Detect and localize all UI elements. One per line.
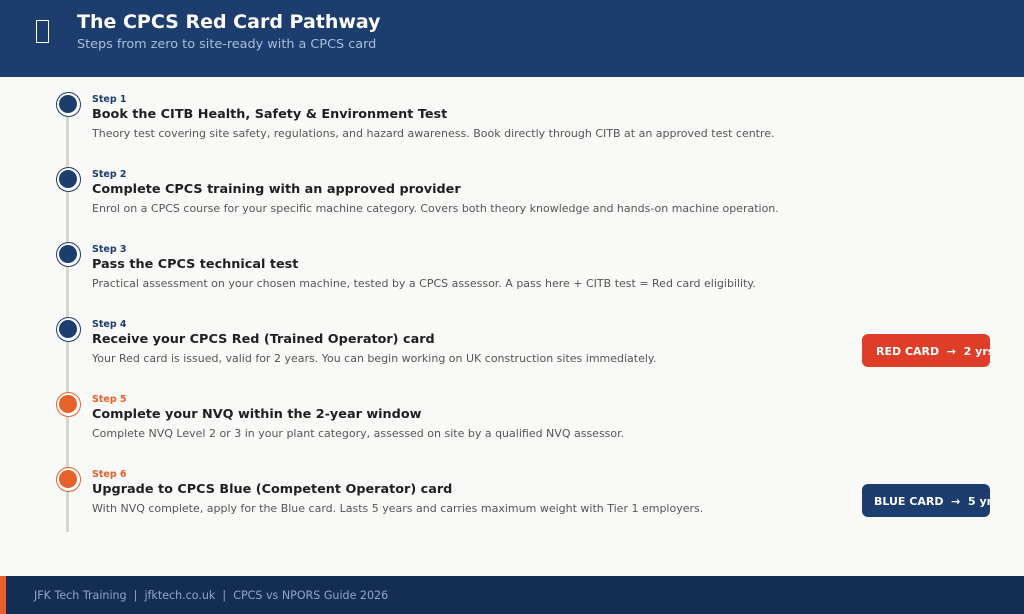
header — [0, 0, 1024, 77]
step 4: Step 4 — [92, 319, 127, 330]
badge: blue card — [862, 484, 990, 517]
step 3: Practical assessment on your chosen machine, tested by a CPCS assessor. A pass here + CITB test = Red card eligibility. — [92, 277, 756, 290]
step 6: With NVQ complete, apply for the Blue card. Lasts 5 years and carries maximum weight with Tier 1 employers. — [92, 502, 703, 515]
step 5: Step 5 — [92, 394, 127, 405]
subtitle: Steps from zero to site-ready with a CPCS card — [77, 37, 376, 52]
step 3 — [56, 242, 756, 290]
footer — [0, 576, 1024, 614]
step 6 — [56, 467, 703, 515]
step 3: Pass the CPCS technical test — [92, 257, 298, 272]
step 1: Theory test covering site safety, regulations, and hazard awareness. Book directly through CITB at an approved test centre. — [92, 127, 775, 140]
step 5: Complete NVQ Level 2 or 3 in your plant category, assessed on site by a qualified NVQ assessor. — [92, 427, 624, 440]
step 2: Step 2 — [92, 169, 127, 180]
step 6: Step 6 — [92, 469, 127, 480]
step 1: Step 1 — [92, 94, 127, 105]
badge: red card — [862, 334, 990, 367]
step 2 — [56, 167, 779, 215]
title: The CPCS Red Card Pathway — [77, 11, 381, 33]
step 4: Your Red card is issued, valid for 2 years. You can begin working on UK construction sites immediately. — [92, 352, 656, 365]
step 5: Complete your NVQ within the 2-year window — [92, 407, 421, 422]
icon: header glyph — [36, 20, 49, 43]
step 6: Upgrade to CPCS Blue (Competent Operator) card — [92, 482, 452, 497]
step 1: Book the CITB Health, Safety & Environment Test — [92, 107, 447, 122]
step 5 — [56, 392, 624, 440]
step 1 — [56, 92, 775, 140]
timeline line — [66, 104, 69, 532]
footer: JFK Tech Training | jfktech.co.uk | CPCS vs NPORS Guide 2026 — [34, 589, 388, 602]
step 4 — [56, 317, 656, 365]
step 2: Enrol on a CPCS course for your specific machine category. Covers both theory knowledge and hands-on machine operation. — [92, 202, 779, 215]
step 2: Complete CPCS training with an approved provider — [92, 182, 461, 197]
step 3: Step 3 — [92, 244, 127, 255]
step 4: Receive your CPCS Red (Trained Operator) card — [92, 332, 435, 347]
